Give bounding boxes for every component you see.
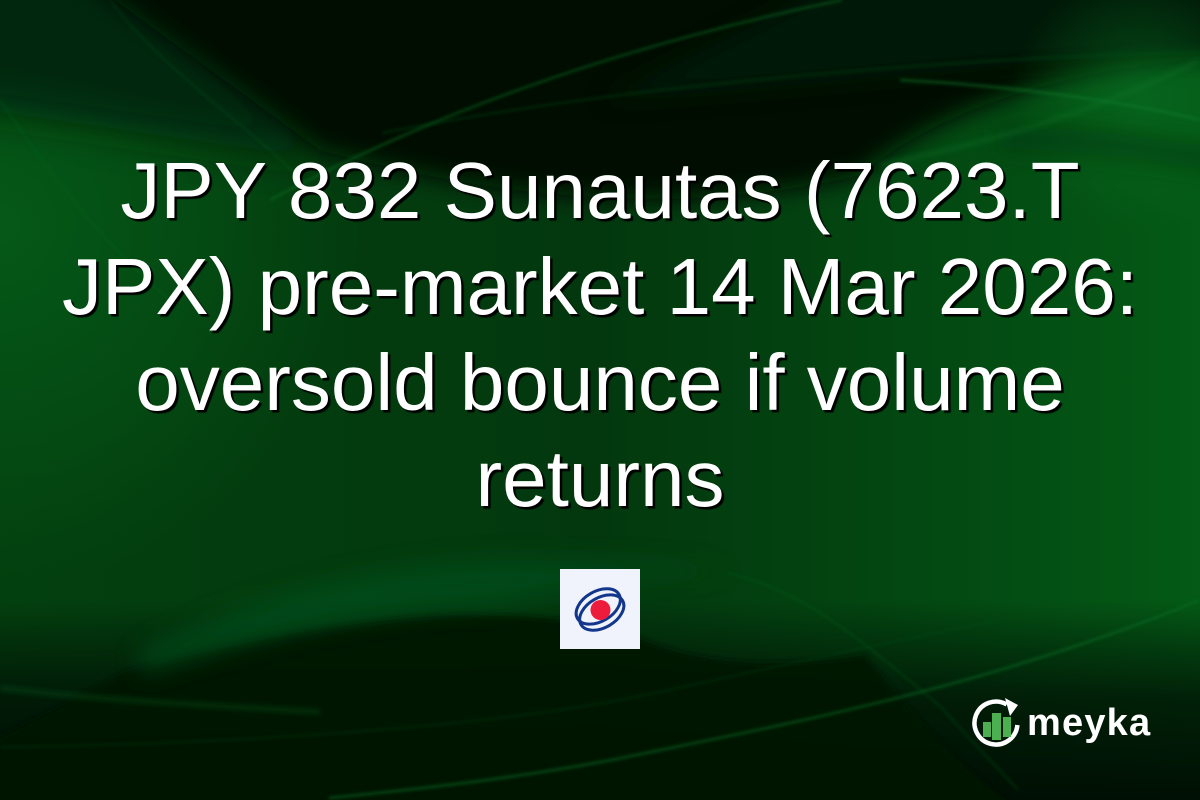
icon: growth chart in circular arrow bbox=[974, 698, 1018, 745]
title: oversold bounce if volume bbox=[135, 338, 1065, 427]
title bbox=[62, 146, 1138, 523]
company logo bbox=[560, 569, 640, 649]
title: JPY 832 Sunautas (7623.T bbox=[120, 146, 1080, 235]
brand logo: meyka bbox=[972, 698, 1151, 747]
light streaks bbox=[270, 0, 842, 200]
title: returns bbox=[476, 434, 724, 523]
title: JPX) pre-market 14 Mar 2026: bbox=[62, 242, 1138, 331]
wordmark: meyka bbox=[1027, 702, 1151, 744]
